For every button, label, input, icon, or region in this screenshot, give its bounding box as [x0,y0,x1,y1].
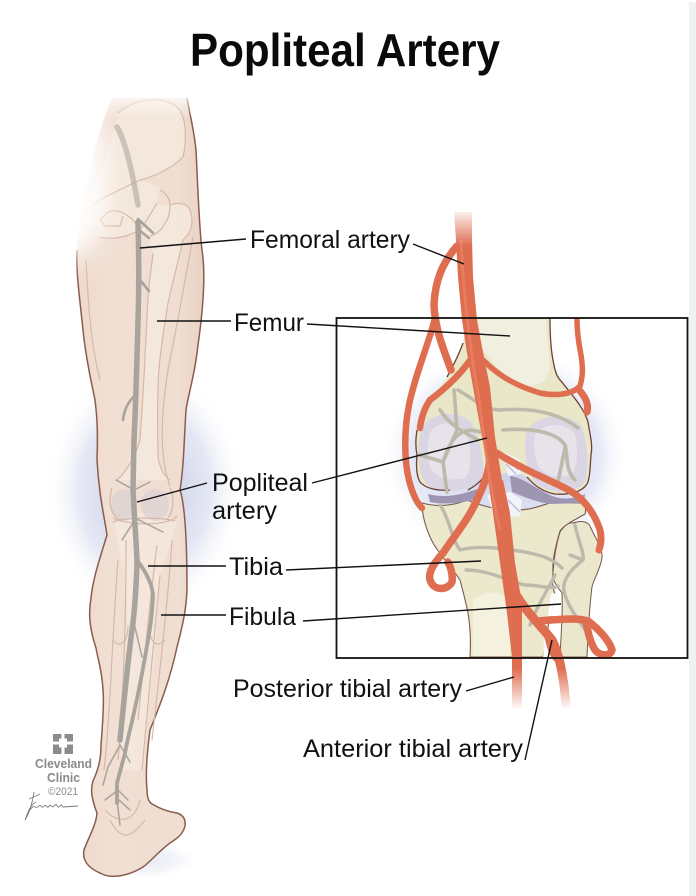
panel: knee detail inset [336,208,688,723]
leader line: femoral artery (leg) [140,239,246,248]
artery: lower right branch [497,453,601,550]
bone: fibula [553,522,602,657]
label: Popliteal artery: artery [212,497,278,525]
vessel end fades [440,208,490,246]
ghosted vessel network [420,390,585,630]
label: Femur: Femur [234,309,304,337]
leader line: fibula (leg) [161,614,226,616]
leader line: fibula (inset) [303,604,561,621]
leader line: popliteal artery (leg) [137,483,207,502]
artery: main femoral-popliteal trunk [454,212,522,715]
illustration: full leg, rear view [38,88,245,880]
artery: anterior tibial [517,596,566,705]
leg silhouette [77,98,204,876]
label: Popliteal artery [212,469,308,525]
label: Tibia: Tibia [229,553,283,581]
leader line: femur (inset) [307,324,510,336]
artery: right genicular branch [483,320,582,395]
label: Fibula: Fibula [229,603,296,631]
title: Popliteal Artery [190,24,500,76]
leader line: tibia (inset) [286,561,481,570]
ligament fibres [487,452,522,518]
label: Anterior tibial artery: Anterior tibial artery [303,735,524,763]
hip fades [38,90,106,260]
leader line: femur (leg) [157,320,231,322]
scrollbar strip at right edge [689,2,696,896]
femoral condyles [418,414,483,491]
artery: left genicular branch [420,359,471,428]
meniscus band [428,476,585,504]
logo: Cleveland Clinic: ©2021 [48,786,78,798]
leg outline [77,98,204,876]
leader line: femoral artery (inset) [413,244,464,264]
artery: left upper branch [434,246,457,370]
logo: Cleveland Clinic: Cleveland [35,756,92,771]
leader line: popliteal artery (inset) [312,438,487,483]
artery: lower left loop [430,455,490,588]
leader line: posterior tibial artery [466,677,514,691]
label: Popliteal artery: Popliteal [212,469,308,497]
logo: Cleveland Clinic: Clinic [47,770,80,785]
leader line: anterior tibial artery [525,640,552,760]
leg artery network [103,127,163,825]
background glow [380,343,630,567]
bone: tibia [422,500,586,657]
label: Posterior tibial artery: Posterior tibial artery [233,675,462,703]
logo: Cleveland Clinic [35,734,92,798]
bone: femur [416,318,592,494]
leader line: tibia (leg) [148,565,226,567]
artery: left descending loop [405,318,435,508]
tibia-fibula gap [543,592,561,657]
artery: fibular loop [538,619,612,655]
knee and lower leg bones [115,513,177,770]
inset frame [336,318,688,658]
artery highlight [461,240,500,530]
femur, pelvis [83,100,192,480]
artist signature [25,792,78,820]
label: Femoral artery: Femoral artery [250,226,410,254]
